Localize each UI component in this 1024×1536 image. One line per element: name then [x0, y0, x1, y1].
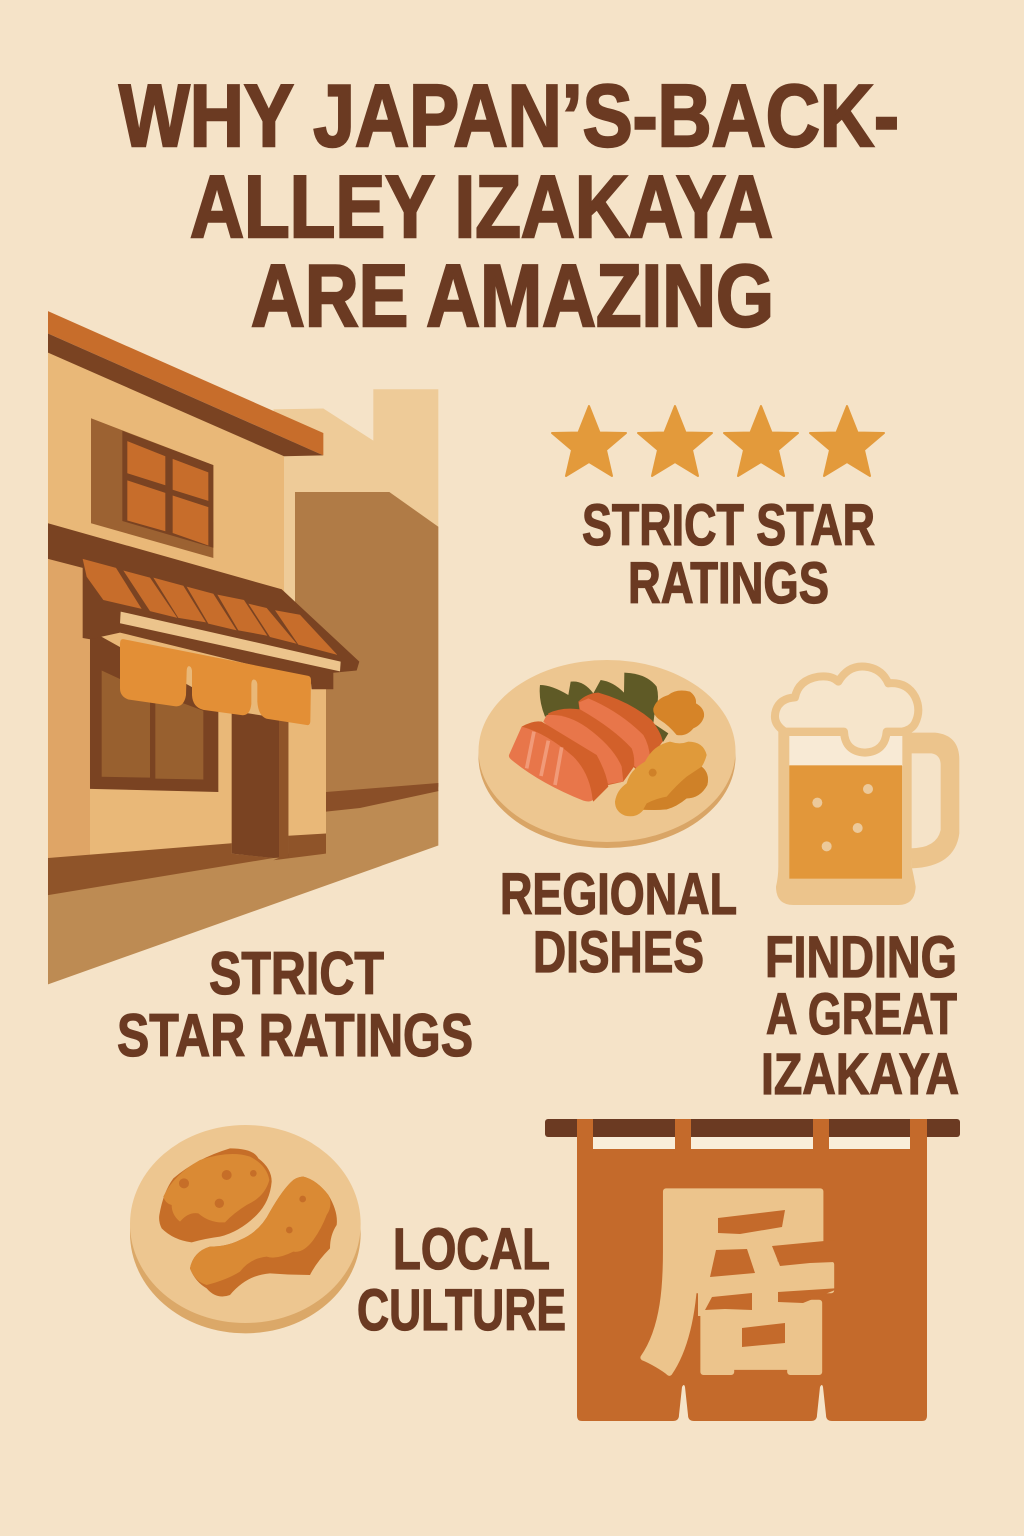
title: ARE AMAZING [251, 246, 774, 345]
icon: fried chicken plate [130, 1125, 361, 1333]
label: strict star ratings (right): RATINGS [628, 551, 829, 616]
noren sign with kanji [545, 1119, 960, 1421]
kanji: 居 [640, 1121, 840, 1411]
illustration: back-alley izakaya building [48, 311, 438, 984]
label: regional dishes [500, 862, 737, 985]
upper window [91, 418, 213, 558]
noren cloth [577, 1119, 927, 1421]
label: local culture: LOCAL [393, 1217, 550, 1282]
icon: beer mug [775, 667, 959, 905]
label: strict star ratings (right): STRICT STAR [582, 493, 875, 558]
label: finding a great izakaya: IZAKAYA [761, 1042, 959, 1107]
icon: sashimi plate [478, 660, 736, 848]
label: strict star ratings (right) [582, 493, 875, 616]
label: local culture: CULTURE [357, 1278, 566, 1343]
label: finding a great izakaya: A GREAT [766, 982, 957, 1047]
label: finding a great izakaya: FINDING [765, 925, 957, 990]
title [119, 66, 899, 345]
awning [48, 523, 359, 689]
label: regional dishes: DISHES [533, 920, 704, 985]
label: strict star ratings (left) [117, 940, 473, 1069]
label: strict star ratings (left): STRICT [209, 940, 384, 1007]
title: WHY JAPAN’S-BACK- [119, 66, 899, 165]
shop window [90, 630, 218, 792]
door [232, 711, 288, 858]
hanging rod [545, 1119, 960, 1137]
label: regional dishes: REGIONAL [500, 862, 737, 927]
roof [48, 311, 323, 456]
title: ALLEY IZAKAYA [190, 157, 773, 256]
label: strict star ratings (left): STAR RATINGS [117, 1002, 473, 1069]
label: finding a great izakaya [761, 925, 959, 1107]
icon: four stars [552, 406, 884, 476]
label: local culture [357, 1217, 566, 1343]
noren curtain [120, 639, 311, 725]
